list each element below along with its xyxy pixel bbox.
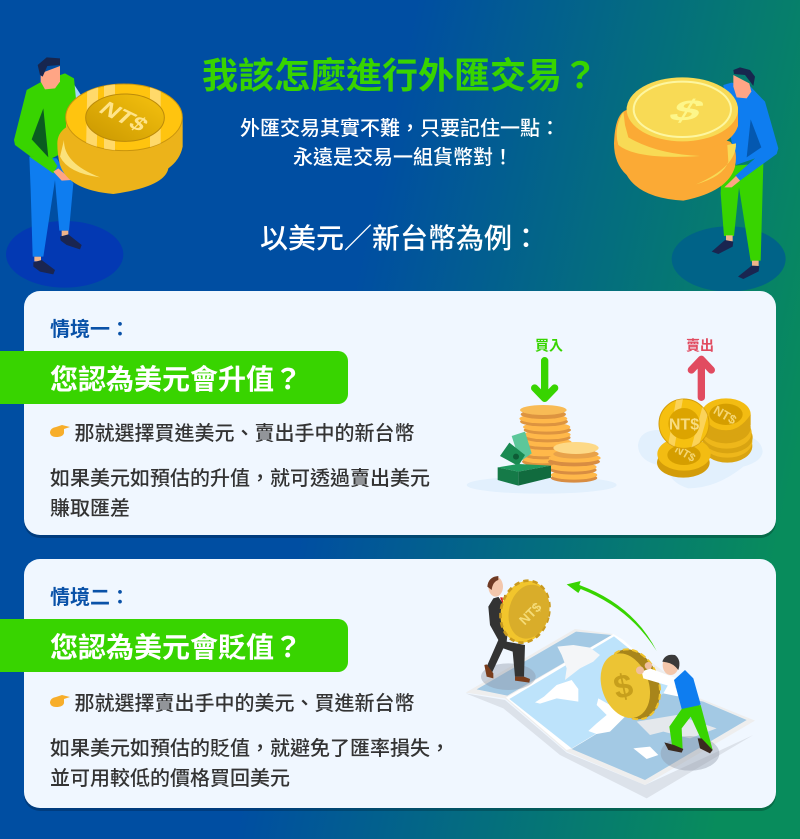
NT$ coin stacks: NT$ (673, 444, 698, 465)
coin label: $ (662, 95, 712, 127)
icon: pointing hand (50, 695, 70, 707)
buy label: 買入 (535, 338, 563, 354)
subheading: 以美元／新台幣為例： (260, 223, 540, 254)
sell label: 賣出 (686, 338, 714, 354)
action text: 那就選擇買進美元、賣出手中的新台幣 (74, 422, 414, 445)
illustration: man in blue holding dollar coins (614, 67, 786, 292)
coins and cash (467, 405, 617, 494)
banner: question (0, 619, 348, 672)
coin label: NT$ (94, 98, 154, 135)
arrow: up (691, 359, 711, 397)
panel: scenario one (0, 291, 776, 538)
panel: scenario two (0, 559, 776, 811)
explanation text: 賺取匯差 (50, 497, 130, 520)
banner: question: 您認為美元會升值？ (50, 364, 302, 395)
NT$ coin stacks (638, 397, 763, 488)
arrow: curved green (567, 581, 657, 651)
illustration: men exchanging coins on a world map (466, 575, 755, 798)
scenario label: 情境一： (50, 317, 130, 341)
explanation text: 並可用較低的價格買回美元 (50, 767, 290, 790)
icon: pointing hand (50, 425, 70, 437)
intro text (240, 117, 560, 169)
intro text: 永遠是交易一組貨幣對！ (293, 146, 513, 169)
banner: question: 您認為美元會貶值？ (50, 632, 302, 663)
banner: question (0, 351, 348, 404)
man in suit carrying NT$ coin (484, 575, 556, 683)
illustration: man in green holding NT$ coins (6, 57, 183, 288)
man in blue pushing dollar coin (592, 642, 713, 753)
man in blue pushing dollar coin: $ (611, 667, 637, 707)
explanation text: 如果美元如預估的貶值，就避免了匯率損失， (50, 737, 450, 760)
action text: 那就選擇賣出手中的美元、買進新台幣 (74, 692, 414, 715)
explanation text (50, 737, 450, 790)
arrow: down (535, 361, 555, 398)
intro text: 外匯交易其實不難，只要記住一點： (240, 117, 560, 140)
NT$ coin stacks: NT$ (711, 403, 739, 427)
illustration: buy US dollars and sell NT dollars (467, 338, 763, 494)
explanation text: 如果美元如預估的升值，就可透過賣出美元 (50, 467, 430, 490)
explanation text (50, 467, 430, 520)
NT$ coin stacks: NT$ (669, 417, 699, 434)
scenario label: 情境二： (50, 585, 130, 609)
title: 我該怎麼進行外匯交易？ (202, 55, 598, 96)
man in suit carrying NT$ coin: NT$ (516, 599, 545, 628)
